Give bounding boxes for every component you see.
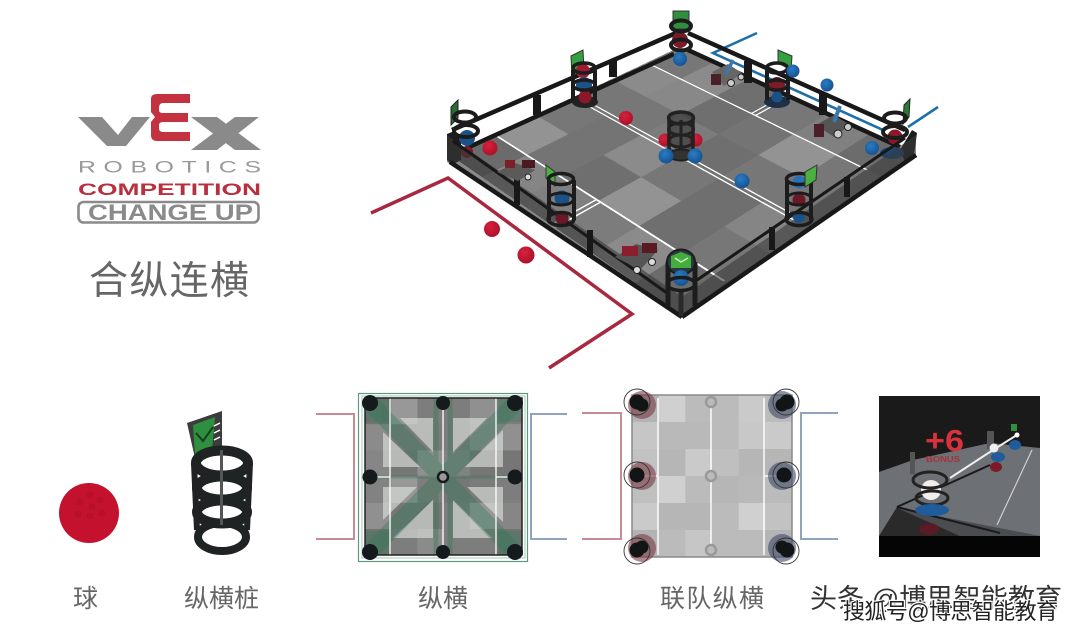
watermark: 搜狐号@博思智能教育 [843,599,1058,624]
VEX Robotics Competition logo: COMPETITION [78,180,261,199]
watermark: 头条 @博思智能教育 [810,584,1062,614]
back walls [452,33,905,152]
goal: front-right middle [786,165,817,226]
plan view: alliance rows [624,389,799,564]
goal: top corner [671,11,691,66]
goal: back-right middle [764,50,792,108]
label: 纵横: 纵横 [418,585,468,613]
goal: right corner [865,99,917,162]
title: 合纵连横: 合纵连横 [89,260,249,303]
ball icon [59,483,119,543]
goal post icon [187,411,250,551]
goal: front-left middle [546,165,574,226]
right blue bracket, plan view one [531,414,567,539]
photo: +6 bonus screenshot: BONUS [926,455,961,464]
blue alliance station outline [713,33,938,130]
VEX Robotics Competition logo: ROBOTICS [78,158,261,176]
photo: +6 bonus screenshot [879,396,1040,557]
left red bracket, plan view one [316,414,354,539]
goal: front corner [667,250,695,316]
label: 纵横桩: 纵横桩 [184,585,259,613]
goal: left corner [447,100,498,165]
field floor with tiles and white lines [459,48,904,313]
plan view: rows of three [358,394,528,562]
goal: back-left middle [571,50,598,108]
red alliance station outline [371,178,632,368]
label: 球: 球 [73,585,98,613]
red balls outside field [484,221,534,264]
photo: +6 bonus screenshot: +6 [925,423,964,458]
label: 联队纵横: 联队纵横 [660,585,764,613]
center goal with balls [658,112,702,164]
robots: red [497,160,658,274]
left red bracket, plan view two [582,413,621,539]
blue balls behind back-right wall [786,64,834,92]
robots: blue [711,60,852,138]
VEX Robotics Competition logo [78,94,261,225]
VEX Robotics Competition logo: CHANGE UP [88,200,253,225]
floor balls [619,111,750,188]
front walls [447,135,916,317]
right blue bracket, plan view two [801,413,838,539]
